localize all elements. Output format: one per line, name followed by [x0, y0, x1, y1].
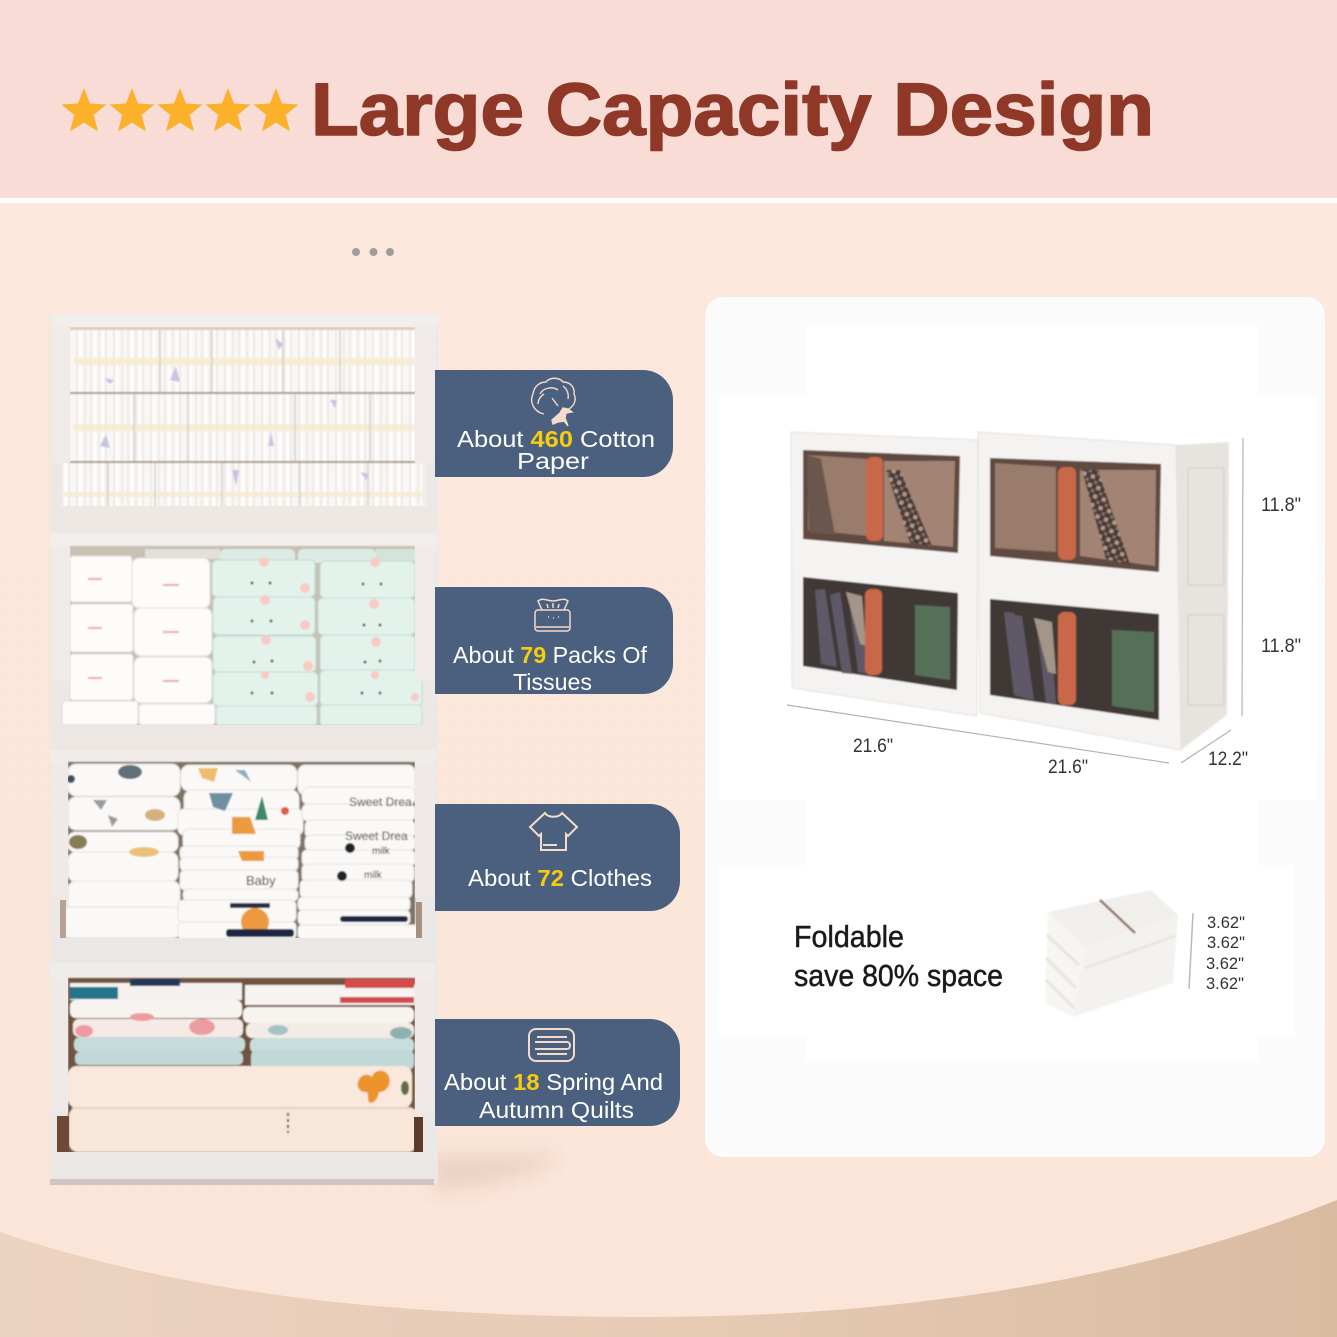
drawer 1 frame — [50, 314, 438, 546]
drawer 1: diapers — [61, 327, 426, 507]
printed words on clothes: milk — [372, 846, 391, 857]
folded height labels — [1206, 914, 1245, 993]
carousel dots — [352, 248, 394, 256]
icon: folded quilt — [529, 1029, 574, 1061]
folded height labels: 3.62" — [1206, 975, 1244, 993]
folded height labels: 3.62" — [1207, 934, 1245, 952]
dimension labels: 12.2" — [1208, 748, 1248, 770]
printed words on clothes: milk — [364, 870, 383, 881]
callout: quilts: Autumn Quilts — [479, 1097, 634, 1123]
drawer 2 frame — [50, 546, 436, 762]
callout: cotton paper — [435, 370, 673, 477]
printed words on clothes — [246, 795, 412, 888]
storage boxes image — [787, 432, 1301, 778]
label: About 72 Clothes — [468, 865, 652, 891]
dimension labels — [853, 494, 1301, 778]
folded height labels: 3.62" — [1207, 914, 1245, 932]
icon: tissue box — [535, 599, 570, 631]
foldable caption: Foldable — [794, 919, 904, 954]
orange flower print — [358, 1071, 390, 1103]
header band — [0, 0, 1337, 203]
drawer 2: tissue packs — [62, 546, 422, 726]
icon: cotton — [532, 378, 575, 426]
drawer 3: folded clothes — [63, 762, 422, 939]
label: About 460 Cotton — [457, 426, 655, 452]
printed words on clothes: Baby — [246, 873, 276, 888]
callout: cotton paper: Paper — [517, 448, 589, 474]
rating stars — [62, 88, 298, 132]
foldable caption — [794, 919, 1003, 993]
title: Large Capacity Design — [311, 68, 1154, 151]
drawer 3 frame — [49, 762, 436, 978]
callout: quilts — [435, 1019, 680, 1126]
panel: product dimensions — [705, 297, 1325, 1157]
printed words on clothes: Sweet Drea — [345, 829, 408, 843]
right box — [978, 432, 1229, 750]
left box — [791, 432, 978, 716]
callout: tissues — [435, 587, 673, 695]
folded height labels: 3.62" — [1206, 955, 1244, 973]
drawer 4 frame — [50, 978, 435, 1179]
dimension lines — [787, 438, 1243, 763]
dimension labels: 21.6" — [1048, 756, 1088, 778]
callout: tissues: Tissues — [513, 669, 592, 695]
icon: t-shirt — [530, 813, 577, 850]
drawer 4: quilts and blankets — [68, 978, 417, 1153]
dimension labels: 11.8" — [1261, 494, 1301, 516]
label: About 79 Packs Of — [453, 642, 648, 668]
callout: clothes — [435, 804, 680, 911]
dimension labels: 21.6" — [853, 735, 893, 757]
shelf unit with four drawers — [49, 314, 554, 1190]
printed words on clothes: Sweet Drea — [349, 795, 412, 809]
label: About 18 Spring And — [444, 1069, 663, 1095]
foldable caption: save 80% space — [794, 958, 1003, 993]
dimension labels: 11.8" — [1261, 635, 1301, 657]
folded box image — [1045, 890, 1245, 1017]
